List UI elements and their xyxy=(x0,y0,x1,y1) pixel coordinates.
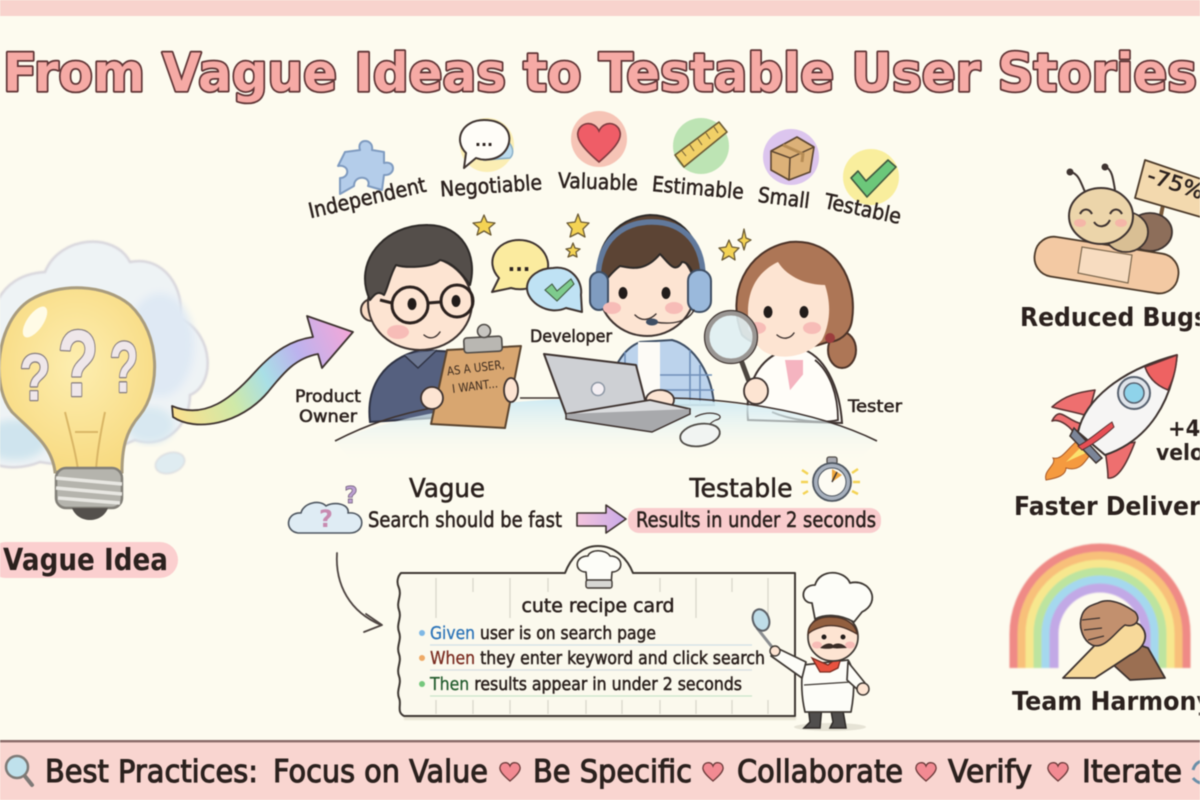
character: tester xyxy=(736,242,856,423)
panel: vague idea xyxy=(0,242,208,578)
icon: check mark xyxy=(843,149,899,205)
velocity stat xyxy=(1156,417,1200,466)
character: product owner xyxy=(361,225,473,422)
top banner band xyxy=(0,0,1200,16)
INVEST criteria xyxy=(306,111,903,229)
icon: heart xyxy=(916,763,936,781)
icon: stars xyxy=(473,214,751,260)
icon: bug on bandage with sign xyxy=(1032,160,1200,296)
icon: laptop xyxy=(544,354,690,432)
vague example: Search should be fast xyxy=(368,508,562,532)
icon: light bulb: ? xyxy=(20,340,50,414)
focus on value: Focus on Value xyxy=(273,754,488,790)
icon: chef hat xyxy=(577,551,621,588)
footer top line xyxy=(0,740,1200,742)
arrow: idea to team xyxy=(172,316,353,425)
decorative stars and speech bubbles xyxy=(473,214,751,312)
card heading: cute recipe card xyxy=(522,595,674,617)
independent label: Independent xyxy=(306,173,428,223)
panel: vague to testable xyxy=(289,457,881,533)
be specific: Be Specific xyxy=(533,754,692,790)
verify: Verify xyxy=(948,754,1032,790)
estimable label: Estimable xyxy=(651,172,745,204)
card ticks xyxy=(436,578,768,714)
small label: Small xyxy=(757,183,811,213)
icon: cloud with question marks: ? xyxy=(344,483,358,509)
vague idea label: Vague Idea xyxy=(3,543,168,578)
arrow: example to recipe card xyxy=(337,553,382,632)
icon: light bulb: ? xyxy=(110,328,138,408)
given step: Given user is on search page xyxy=(430,623,656,644)
then step: Then results appear in under 2 seconds xyxy=(429,674,742,695)
icon: heart xyxy=(500,763,520,781)
icon: clipboard: I WANT... xyxy=(451,376,499,396)
icon: box xyxy=(763,129,819,185)
arrow: vague to testable xyxy=(577,505,626,533)
icon: negotiable bubble: ... xyxy=(475,131,493,150)
testable example pill: Results in under 2 seconds xyxy=(636,508,876,532)
developer label: Developer xyxy=(530,327,612,347)
product owner label: Product xyxy=(295,387,361,407)
icon: clasped hands xyxy=(1063,601,1165,680)
vague heading: Vague xyxy=(409,474,485,504)
icon: chef character xyxy=(750,573,872,731)
negotiable label: Negotiable xyxy=(439,170,543,202)
icon: clipboard: AS A USER, xyxy=(446,357,505,378)
icon: magnifying glass xyxy=(704,310,768,404)
collaborate: Collaborate xyxy=(737,754,903,790)
panel: benefits xyxy=(1012,160,1200,717)
panel: best practices footer xyxy=(0,740,1200,800)
icon: negotiable bubble xyxy=(460,118,514,172)
panel: recipe card xyxy=(398,546,872,731)
icon: cloud with question marks xyxy=(289,483,362,533)
product owner label xyxy=(295,387,361,427)
card body xyxy=(398,546,795,716)
icon: heart xyxy=(1048,763,1068,781)
icon: puzzle piece xyxy=(338,141,393,194)
character: developer xyxy=(590,215,714,405)
card shadow xyxy=(404,714,796,720)
icon: mouse xyxy=(678,413,722,449)
valuable label: Valuable xyxy=(558,169,638,195)
icon: stopwatch xyxy=(801,457,860,501)
when step: When they enter keyword and click search xyxy=(430,648,765,669)
iterate: Iterate xyxy=(1082,754,1182,790)
icon: magnifying glass xyxy=(6,756,32,785)
icon: clipboard xyxy=(421,324,521,428)
icon: light bulb xyxy=(0,288,155,520)
table edge xyxy=(335,398,877,441)
footer band xyxy=(0,741,1200,800)
icon: thought cloud xyxy=(0,242,208,477)
icon: yellow speech bubble xyxy=(492,240,548,292)
icon: cloud with question marks: ? xyxy=(319,505,333,533)
icon: heart xyxy=(571,111,627,167)
testable heading: Testable xyxy=(689,474,792,504)
panel: team scene xyxy=(295,215,902,460)
icon: light bulb: ? xyxy=(58,311,98,417)
table xyxy=(335,398,877,460)
icon: heart xyxy=(703,763,723,781)
icon: cycle arrows xyxy=(1193,761,1200,783)
product owner label: Owner xyxy=(299,407,357,427)
icon: rainbow xyxy=(1014,548,1186,668)
icon: blue speech bubble xyxy=(527,268,582,312)
icon: yellow speech bubble: ... xyxy=(508,252,530,276)
icon: rocket xyxy=(1046,355,1177,480)
tester label: Tester xyxy=(847,397,902,417)
best practices text: Best Practices: xyxy=(45,754,258,790)
testable label: Testable xyxy=(821,189,903,229)
icon: ruler xyxy=(673,118,729,174)
